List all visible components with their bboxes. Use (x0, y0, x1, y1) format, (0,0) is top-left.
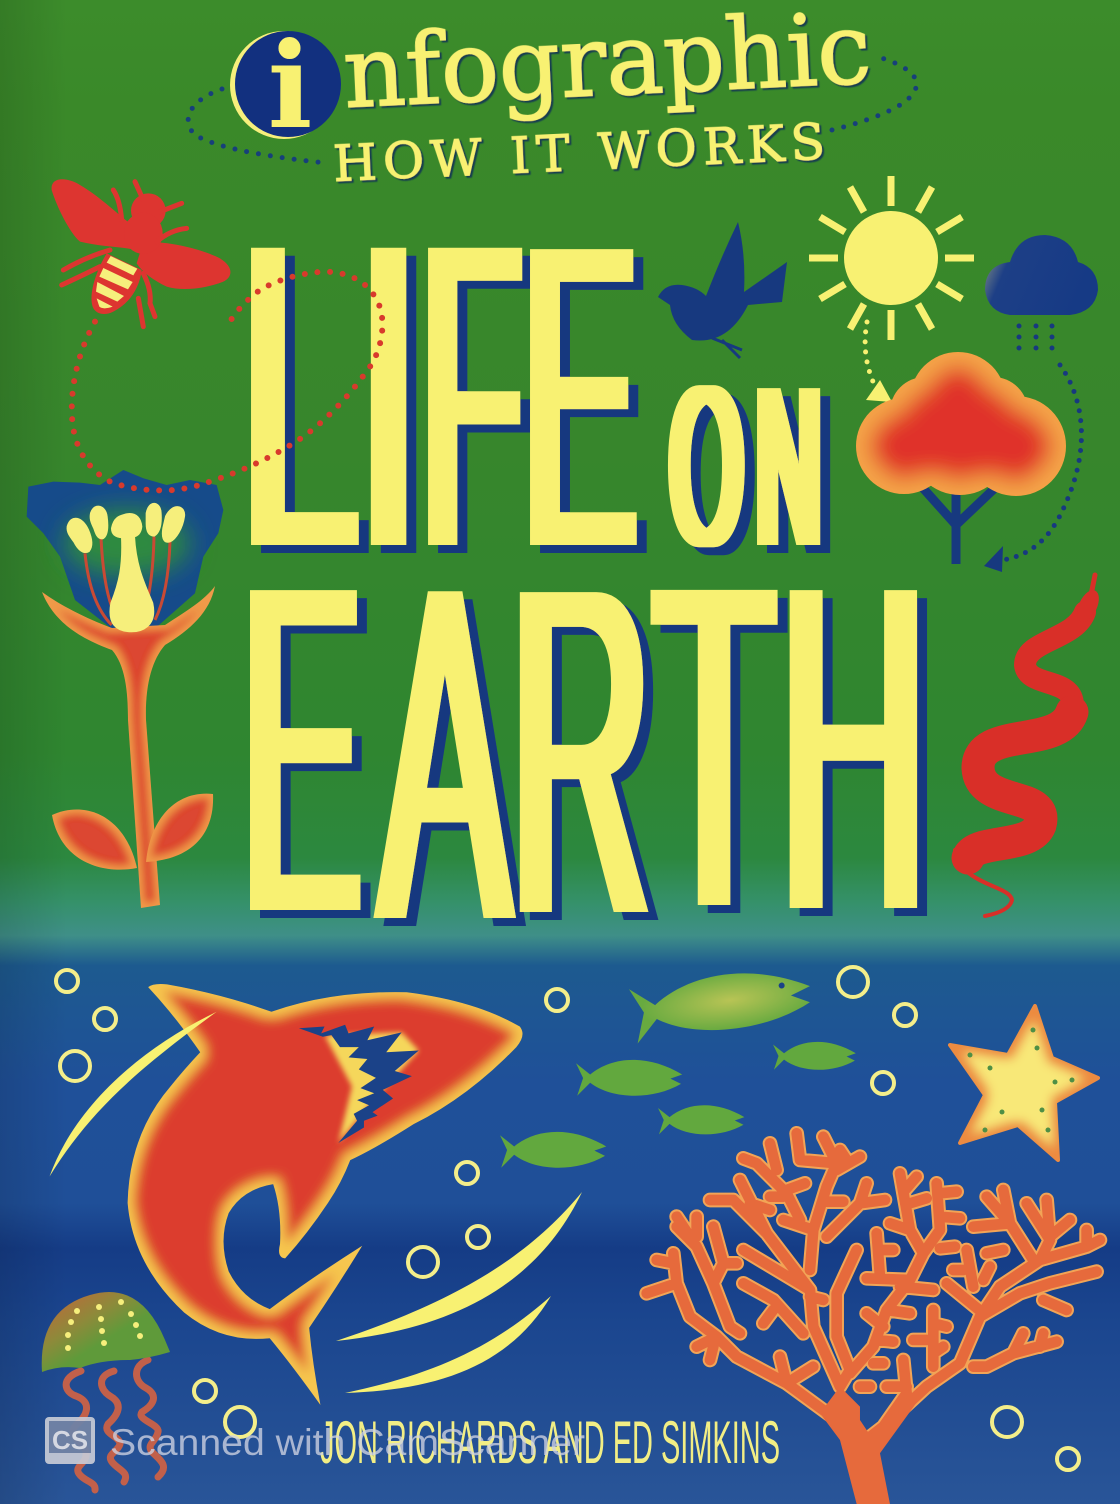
shark mouth (299, 1025, 419, 1143)
series subtitle: HOW IT WORKS (332, 113, 826, 193)
logo badge (230, 16, 341, 155)
leaves (52, 794, 213, 870)
watermark text: Scanned with CamScanner (110, 1422, 585, 1463)
icon: jellyfish (42, 1292, 170, 1490)
small fish (658, 1105, 744, 1134)
scanner watermark (45, 1417, 585, 1464)
sepals and stem (42, 586, 215, 908)
title line: EARTH (242, 489, 927, 1019)
title line: LIFE: L (241, 155, 359, 638)
bell (42, 1292, 170, 1372)
title line: EARTH: H (780, 490, 927, 1006)
fish school (500, 964, 856, 1168)
watermark badge (45, 1417, 95, 1464)
petals (27, 470, 223, 630)
icon: starfish (950, 1006, 1098, 1160)
title line: LIFE: E (523, 157, 637, 637)
icon: bee (52, 179, 230, 327)
shark body (128, 984, 523, 1405)
stamens (68, 505, 183, 631)
icon: sun (809, 176, 974, 340)
title line: LIFE: I (357, 156, 421, 637)
main title (241, 155, 927, 1019)
speed line (50, 1012, 217, 1177)
logo badge: i (268, 16, 312, 155)
icon: tree (856, 352, 1066, 564)
arrow: rain to tree (984, 365, 1081, 572)
title line: LIFE (241, 155, 637, 638)
title line: ON: O (671, 338, 742, 594)
series logo (188, 0, 916, 193)
small fish (576, 1060, 682, 1096)
shark teeth glow (325, 1032, 419, 1143)
title line: LIFE: F (422, 155, 522, 638)
dotted orbit (188, 57, 916, 163)
bubbles (56, 967, 1079, 1470)
icon: flower (27, 470, 223, 908)
title line: EARTH: A (380, 489, 510, 1019)
pollination trail (72, 272, 382, 490)
title line: EARTH: T (653, 490, 775, 1002)
title line: ON (671, 338, 820, 594)
big fish (629, 964, 814, 1044)
small fish (500, 1132, 606, 1168)
shark (50, 984, 523, 1405)
title line: ON: N (757, 339, 820, 594)
icon: snake (955, 575, 1103, 916)
small fish (773, 1042, 856, 1070)
watermark badge: CS (52, 1425, 88, 1455)
title line: EARTH: E (242, 489, 361, 1009)
speed lines (336, 1192, 582, 1393)
tentacles (66, 1360, 164, 1490)
arrow: sun to tree (865, 322, 892, 402)
icon: bird (658, 222, 787, 358)
icon: rain cloud (985, 235, 1098, 356)
icon: coral (647, 1133, 1100, 1504)
title line: EARTH: R (511, 493, 650, 1011)
